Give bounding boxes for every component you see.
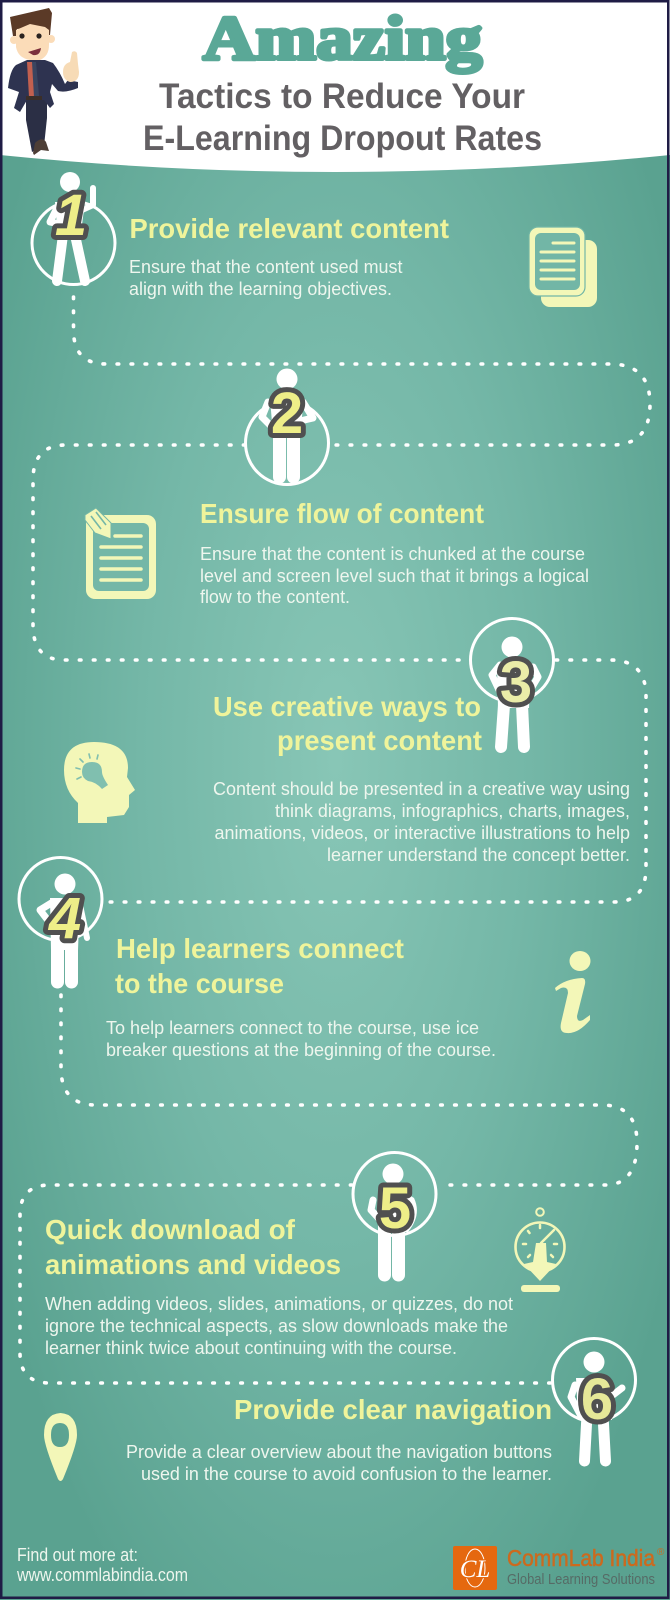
step 4 text: breaker questions at the beginning of the course. [106, 1039, 496, 1060]
step 5 heading: Quick download of [45, 1214, 296, 1245]
step 1 text: Ensure that the content used must [129, 256, 402, 277]
logo: CommLab India: ® [657, 1547, 665, 1558]
number 4: 4 [48, 886, 81, 951]
step 4 text: To help learners connect to the course, use ice [106, 1017, 479, 1038]
icon: map pin [44, 1413, 77, 1481]
step 4 heading [115, 933, 404, 999]
step 2 figure [246, 368, 328, 484]
step 5 heading [45, 1214, 341, 1280]
step 2 text [200, 543, 589, 607]
icon: stopwatch download [516, 1208, 564, 1292]
step 2 text: Ensure that the content is chunked at the course [200, 543, 585, 564]
number 2: 2 [271, 381, 303, 446]
step 3 text: Content should be presented in a creative way using [213, 778, 630, 799]
step 4 figure [19, 858, 102, 982]
step 6 text [126, 1441, 552, 1484]
step 5 heading: animations and videos [45, 1249, 341, 1280]
footer link text [16, 1544, 188, 1585]
step 3 text: think diagrams, infographics, charts, images, [275, 800, 630, 821]
step 5 text: learner think twice about continuing with the course. [45, 1337, 457, 1358]
icon: notepad with pencil [85, 508, 156, 599]
step 3 text [213, 778, 630, 865]
header panel [0, 0, 670, 172]
illustration: businessman thumbs up [8, 8, 79, 155]
step 5 figure [353, 1152, 436, 1275]
step 4 heading: to the course [115, 968, 284, 999]
number 5: 5 [379, 1176, 411, 1241]
step 3 text: animations, videos, or interactive illustrations to help [214, 822, 630, 843]
logo: CommLab India: CL [460, 1556, 490, 1583]
step 6 heading: Provide clear navigation [234, 1394, 552, 1425]
step 1 text: align with the learning objectives. [129, 278, 392, 299]
step 2 text: flow to the content. [200, 586, 350, 607]
step 3 heading [213, 691, 482, 756]
subtitle line 1: Tactics to Reduce Your [159, 77, 525, 116]
icon: head with light bulb [64, 742, 135, 823]
step 6 figure [552, 1338, 636, 1461]
number 1: 1 [55, 183, 87, 248]
step 6 text: Provide a clear overview about the navigation buttons [126, 1441, 552, 1462]
step 4 heading: Help learners connect [116, 933, 404, 964]
step 4 text [106, 1017, 496, 1060]
step 3 figure [470, 618, 554, 747]
step 2 heading: Ensure flow of content [200, 498, 484, 529]
step 1 figure [32, 172, 115, 284]
subtitle line 2: E-Learning Dropout Rates [143, 119, 542, 158]
title: Amazing: Amazing [203, 5, 482, 73]
logo: CommLab India: CommLab India [507, 1545, 655, 1571]
step 1 heading: Provide relevant content [130, 213, 449, 244]
number 6: 6 [581, 1367, 613, 1432]
number 3: 3 [500, 650, 532, 715]
footer link text: Find out more at: [17, 1544, 138, 1565]
footer link text: www.commlabindia.com [16, 1564, 188, 1585]
logo: CommLab India [453, 1545, 665, 1590]
step 3 heading: present content [277, 725, 482, 756]
step 3 heading: Use creative ways to [213, 691, 481, 722]
step 2 text: level and screen level such that it brings a logical [200, 565, 589, 586]
step 5 text: When adding videos, slides, animations, or quizzes, do not [45, 1293, 513, 1314]
step 5 text: ignore the technical aspects, as slow downloads make the [45, 1315, 508, 1336]
dashed path connecting the steps [20, 297, 650, 1383]
icon: information i [555, 951, 590, 1033]
icon: stacked documents [529, 227, 597, 307]
step 5 text [45, 1293, 513, 1358]
step 1 text [129, 256, 402, 299]
step 6 text: used in the course to avoid confusion to the learner. [141, 1463, 552, 1484]
step 3 text: learner understand the concept better. [327, 844, 630, 865]
